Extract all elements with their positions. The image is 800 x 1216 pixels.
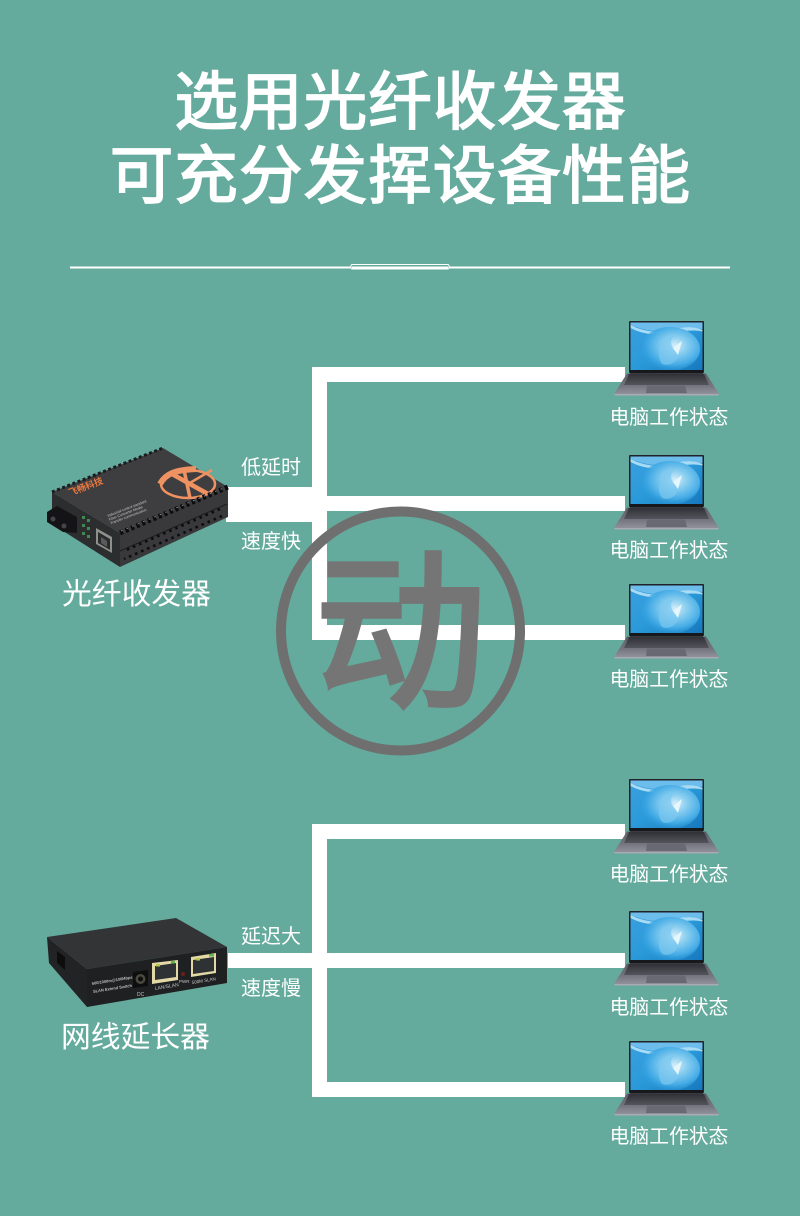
front text	[91, 974, 135, 994]
watermark: circled character: 动	[314, 539, 486, 731]
front text: SLAN Extend Switch	[93, 983, 133, 994]
power LED	[181, 972, 185, 976]
connection lines: fiber transceiver	[226, 367, 625, 640]
label: slow: 速度慢	[241, 977, 301, 1000]
label: low latency: 低延时	[241, 456, 301, 479]
watermark: circled character	[281, 512, 520, 750]
laptop 6: 电脑工作状态	[610, 1126, 728, 1148]
front text: 500/1000m@100Mbps	[91, 974, 134, 986]
title	[110, 68, 691, 212]
top face	[52, 448, 228, 533]
status LEDs	[82, 516, 90, 538]
orange logo	[160, 469, 215, 498]
device: cable extender: PWR	[179, 979, 190, 984]
left face	[52, 492, 120, 567]
laptop 4	[610, 779, 728, 886]
device: cable extender: LAN/SLAN	[154, 982, 180, 992]
SLAN port	[191, 953, 216, 977]
device: cable extender	[47, 918, 227, 1007]
top face	[47, 918, 227, 969]
laptop 5: 电脑工作状态	[610, 997, 728, 1019]
vents	[124, 509, 222, 559]
laptop 3	[610, 584, 728, 691]
front face	[87, 947, 227, 1007]
spec text: Fiber Converter Media	[108, 505, 143, 522]
label: fast: 速度快	[241, 530, 301, 553]
laptop 2: 电脑工作状态	[610, 540, 728, 562]
laptop 2	[610, 455, 728, 562]
laptop 6	[610, 1041, 728, 1148]
left face	[47, 937, 87, 1007]
side vent	[57, 951, 65, 970]
right face	[120, 487, 228, 567]
laptop 3: 电脑工作状态	[610, 669, 728, 691]
spec text	[107, 499, 150, 525]
label: high latency: 延迟大	[241, 925, 301, 948]
caption: fiber transceiver: 光纤收发器	[62, 578, 211, 611]
laptop 4: 电脑工作状态	[610, 864, 728, 886]
device: cable extender: 500M SLAN	[191, 976, 216, 985]
DC jack	[133, 970, 148, 988]
face ridge	[120, 504, 227, 551]
divider	[70, 264, 730, 269]
laptop 1: 电脑工作状态	[610, 407, 728, 429]
caption: cable extender: 网线延长器	[61, 1021, 210, 1054]
title: 选用光纤收发器	[174, 68, 627, 138]
device: cable extender: DC	[137, 992, 145, 998]
LAN port	[152, 960, 178, 984]
brand mark: 飞畅科技	[67, 475, 104, 498]
laptop 5	[610, 911, 728, 1019]
laptop 1	[610, 321, 728, 429]
fiber connector	[47, 506, 77, 533]
title: 可充分发挥设备性能	[110, 142, 691, 212]
RJ45 port	[96, 528, 112, 553]
spec text: Industrial control standard	[107, 499, 147, 518]
spec text: Transfer communication	[110, 508, 147, 525]
connection lines: cable extender	[228, 824, 625, 1097]
device: fiber transceiver	[47, 448, 228, 567]
serrated edge	[120, 487, 228, 533]
